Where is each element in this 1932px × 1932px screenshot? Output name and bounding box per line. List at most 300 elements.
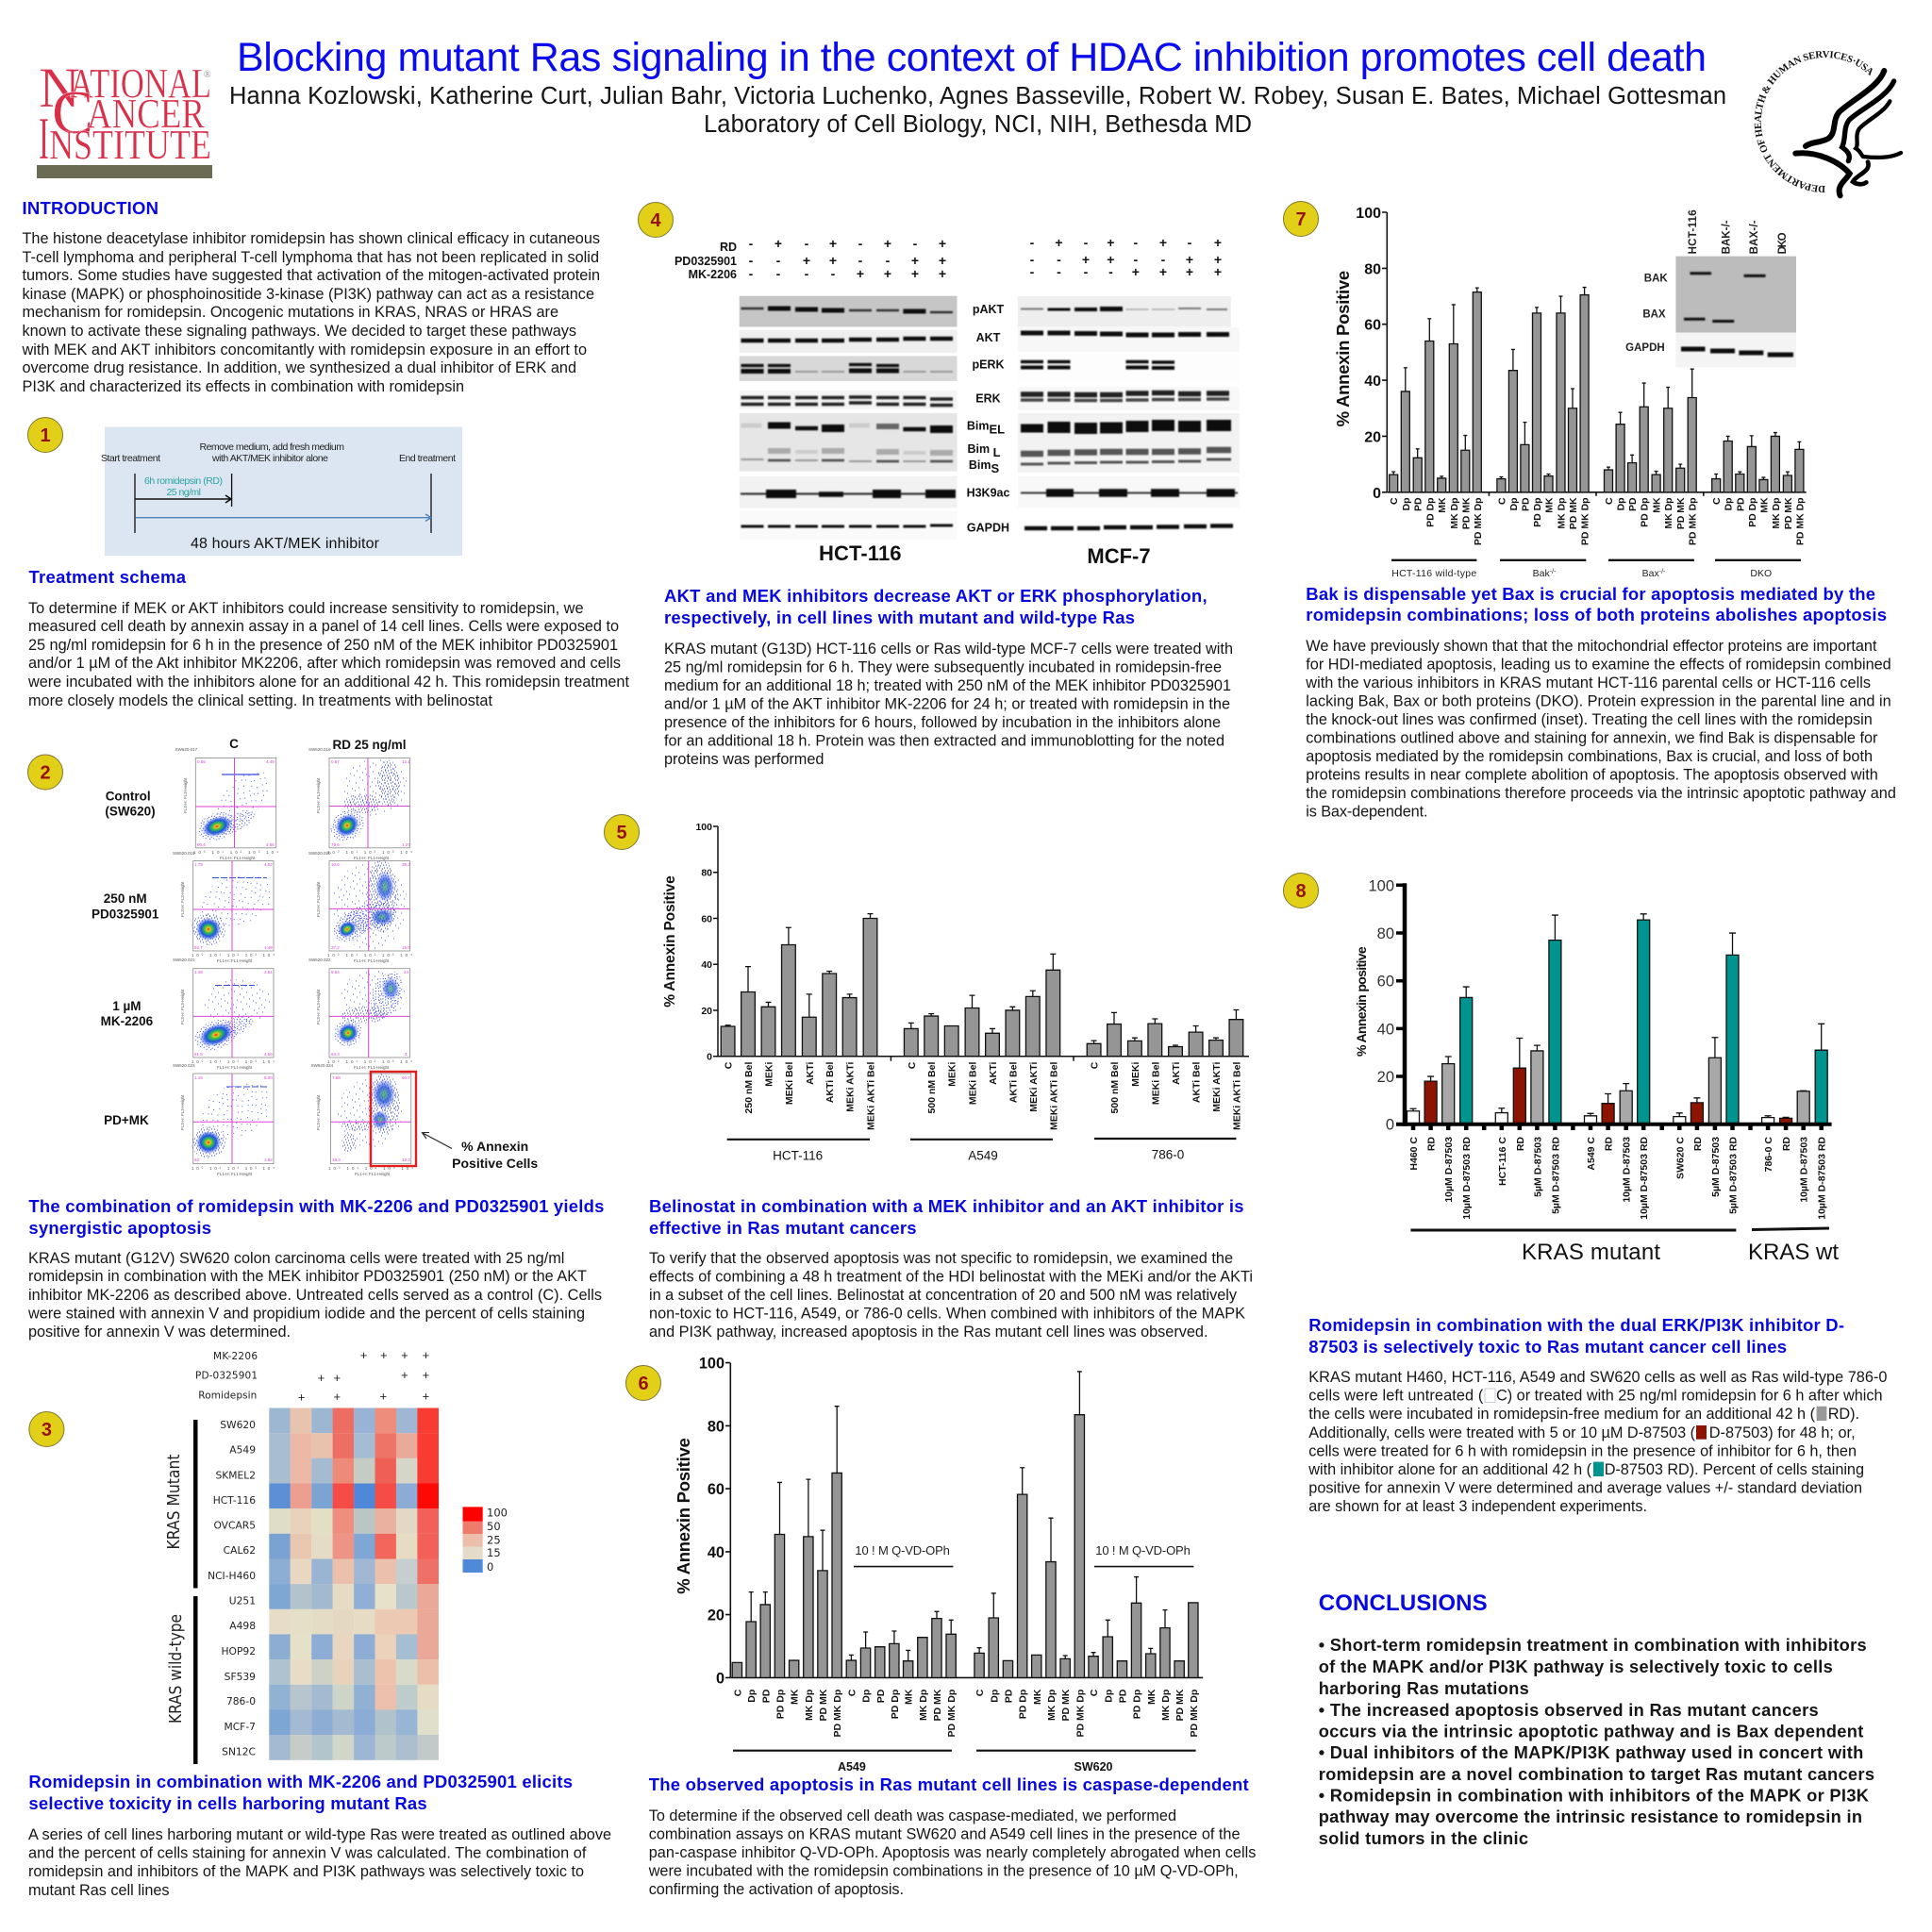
protein labels: GAPDH: [967, 521, 1009, 534]
cell line labels: [208, 1419, 256, 1758]
axes: 20: [1377, 1069, 1394, 1086]
axes: 40: [708, 1544, 724, 1561]
plot: PD RD: SW620.020: [308, 851, 331, 856]
text: treatment schema: measured cell death by annexin assay in a panel of 14 cell lines. Cells were exposed to: [28, 618, 619, 635]
x labels: PD: [1117, 1689, 1128, 1703]
bars: [732, 1372, 1198, 1677]
text: conclusions bullets: [1319, 1635, 1874, 1848]
bars: [1407, 914, 1827, 1124]
x labels: PD MK Dp: [1794, 497, 1806, 545]
callout: percent annexin positive cells: % Annexin: [461, 1139, 528, 1154]
x labels: PD: [1413, 497, 1424, 511]
panel 7: Bak/Bax bar chart: [1333, 206, 1807, 579]
x labels: 500 nM Bel: [926, 1062, 938, 1113]
x labels: MK: [1146, 1689, 1158, 1705]
plot: MK C: 4.55: [264, 1052, 273, 1057]
plot: control RD: 12.1: [402, 759, 410, 764]
treatment signs: MCF-7: +: [1107, 252, 1114, 267]
plus markers: +: [334, 1371, 341, 1385]
group labels: [1391, 560, 1801, 579]
logo: National Cancer Institute: NSTITUTE: [49, 122, 211, 168]
x labels: MK Dp: [1449, 497, 1460, 529]
panel 1: treatment schema diagram: 25 ng/ml: [166, 487, 201, 498]
axes: 0: [1386, 1117, 1394, 1134]
text: panel 8 with colour keys: D-87503 RD). Percent of cells staining: [1605, 1461, 1864, 1478]
panel 5: belinostat bar chart: [662, 822, 1249, 1162]
cell line labels: HOP92: [221, 1645, 256, 1657]
x labels: MEKi: [947, 1062, 958, 1087]
text: panel 5: in a subset of the cell lines. Belinostat at concentration of 20 and 500 nM was relatively: [649, 1287, 1238, 1304]
protein labels: pAKT: [973, 303, 1005, 316]
text: panel 6: combination assays on KRAS mutant SW620 and A549 cell lines in the presence of the: [649, 1826, 1240, 1843]
text: panel 3: romidepsin and inhibitors of the MAPK and PI3K pathways was selectively toxic to: [28, 1863, 584, 1880]
plot: PD+MK C: 5.00: [264, 1075, 273, 1080]
plot: MK C: 1.48: [194, 970, 203, 974]
plot: PD RD: 10.6: [331, 862, 340, 867]
x labels: PD MK Dp: [946, 1690, 958, 1737]
heading: panel 4: AKT and MEK inhibitors decrease AKT or ERK phosphorylation,: [664, 586, 1208, 606]
x labels: RD: [1426, 1137, 1438, 1151]
text: panel 7: the knock-out lines was confirmed (inset). Treating the cell lines with the romidepsin: [1306, 711, 1873, 728]
logo: National Cancer Institute: ANCER: [87, 91, 206, 137]
x labels: 5µM D-87503: [1710, 1137, 1722, 1197]
x labels: PD Dp: [1747, 497, 1758, 527]
x labels: PD: [1520, 497, 1531, 511]
x labels: MEKi: [764, 1062, 775, 1087]
text: panel 4: and/or 1 µM of the AKT inhibitor MK-2206 for 24 h; or treated with romidepsin in the: [664, 696, 1230, 713]
inset: Bak/Bax western blot: BAX: [1642, 309, 1666, 321]
text: conclusions bullets: harboring Ras mutations: [1319, 1678, 1529, 1698]
cell line captions: [819, 541, 1151, 568]
column and row labels: PD0325901: [92, 908, 159, 921]
axes: 20: [701, 1006, 712, 1017]
x labels: MK Dp: [1046, 1690, 1058, 1721]
text: panel 7: is Bax-dependent.: [1306, 804, 1428, 821]
plot: MK C: SW620.021: [173, 958, 195, 962]
treatment labels: [675, 241, 737, 281]
cell line labels: SW620: [220, 1419, 256, 1431]
logo: National Cancer Institute: C: [52, 78, 93, 147]
plot: MK C: 91.5: [194, 1052, 203, 1057]
text: panel 8 with colour keys: Additionally, cells were treated with 5 or 10 µM D-87503 (: [1308, 1424, 1696, 1441]
treatment header: PD-0325901: [195, 1370, 258, 1381]
badge 8: 8: [1295, 881, 1307, 902]
cell line labels: A549: [229, 1443, 256, 1457]
column and row labels: RD 25 ng/ml: [332, 738, 407, 752]
badge 2: [28, 755, 62, 790]
treatment signs: MCF-7: -: [1133, 252, 1138, 267]
treatment signs: MCF-7: +: [1159, 264, 1167, 279]
heatmap legend: 100: [487, 1506, 508, 1519]
text: conclusions bullets: solid tumors in the clinic: [1319, 1828, 1528, 1848]
column and row labels: (SW620): [105, 804, 156, 819]
inset: Bak/Bax western blot: HCT-116: [1688, 209, 1699, 254]
badge 7: [1283, 202, 1319, 236]
heading: panel 5: Belinostat in combination with a MEK inhibitor and an AKT inhibitor is: [649, 1196, 1243, 1216]
x labels: PD Dp: [1132, 1690, 1143, 1719]
axes: 60: [1364, 318, 1381, 334]
panel 4: western blots: [675, 235, 1240, 568]
heading: treatment schema: Treatment schema: [28, 567, 187, 587]
treatment signs: MCF-7: -: [1084, 235, 1089, 250]
treatment signs: MCF-7: -: [1188, 235, 1192, 250]
Q-VD-OPh annotations: 10 ! M Q-VD-OPh: [1095, 1543, 1191, 1557]
x labels: 10µM D-87503 RD: [1817, 1137, 1828, 1220]
protein labels: H3K9ac: [967, 487, 1009, 500]
x labels: PD: [875, 1689, 887, 1703]
text: panel 7: with the various inhibitors in KRAS mutant HCT-116 parental cells or HCT-116 cells: [1305, 675, 1871, 691]
treatment signs: HCT-116: +: [857, 266, 864, 281]
group labels: Bak: [1533, 568, 1550, 579]
text: panel 2: inhibitor MK-2206 as described above. Untreated cells served as a control (C). Cells: [28, 1287, 602, 1304]
x labels: Dp: [1508, 497, 1520, 510]
callout: percent annexin positive cells: Positive Cells: [452, 1156, 538, 1171]
text: panel 8 with colour keys: with inhibitor alone for an additional 42 h (: [1307, 1461, 1592, 1478]
x labels: Dp: [861, 1690, 873, 1703]
text: panel 7: combinations outlined above and staining for annexin, we find Bak is dispensable for: [1306, 730, 1878, 747]
treatment signs: MCF-7: +: [1107, 235, 1114, 250]
x labels: AKTi: [1171, 1062, 1182, 1085]
protein labels: S: [991, 461, 999, 475]
x labels: PD MK: [1568, 497, 1579, 529]
x labels: [1408, 1137, 1828, 1220]
x labels: C: [846, 1689, 858, 1696]
x labels: MK Dp: [1663, 497, 1674, 529]
treatment signs: HCT-116: -: [886, 253, 891, 268]
treatment signs: MCF-7: -: [1030, 264, 1035, 279]
x labels: 5µM D-87503 RD: [1550, 1137, 1561, 1214]
plot: PD+MK C: [173, 1063, 282, 1176]
panel 1: treatment schema diagram: with AKT/MEK inhibitor alone: [211, 453, 328, 464]
x labels: C: [1496, 497, 1507, 505]
plot: PD+MK RD with gate: FL3-H: FL3-Height: [316, 1094, 321, 1130]
plot: PD+MK C: 92: [194, 1158, 200, 1162]
protein labels: Bim: [967, 419, 989, 432]
text: panel 8 with colour keys: [1307, 1369, 1887, 1515]
text: panel 5: non-toxic to HCT-116, A549, or 786-0 cells. When combined with inhibitors of the MAPK: [649, 1306, 1245, 1323]
group bars and labels: KRAS wild-type: [166, 1614, 186, 1724]
x labels: RD: [1692, 1137, 1704, 1151]
plot: MK C: 10⁰ 10¹ 10² 10³ 10⁴: [192, 1059, 275, 1064]
text: introduction: T-cell lymphoma and peripheral T-cell lymphoma that has not been replicated in solid: [23, 249, 599, 266]
x labels: AKTi Bel: [1191, 1062, 1203, 1103]
heading: panel 8: Romidepsin in combination with the dual ERK/PI3K inhibitor D-: [1308, 1315, 1844, 1335]
cell line labels: U251: [229, 1595, 256, 1607]
text: panel 3: [28, 1826, 611, 1899]
treatment signs: MCF-7: -: [1084, 264, 1089, 279]
plot: control C: 10⁰ 10¹ 10² 10³ 10⁴: [193, 850, 278, 855]
plot: PD+MK RD with gate: 60.7: [402, 1075, 410, 1080]
x labels: MEKi AKTi Bel: [1048, 1062, 1059, 1130]
heading: panel 6: The observed apoptosis in Ras mutant cell lines is caspase-dependent: [649, 1774, 1249, 1794]
plot: PD C: FL3-H: FL3-Height: [180, 881, 185, 917]
plus markers: +: [360, 1348, 367, 1362]
plot: PD+MK RD with gate: 10⁰ 10¹ 10² 10³ 10⁴: [328, 1166, 413, 1171]
x labels: MEKi AKTi: [845, 1062, 857, 1112]
group labels: HCT-116 wild-type: [1391, 568, 1476, 579]
heading: panel 4: [664, 586, 1208, 627]
plot: MK RD: FL1-H: FL1-Height: [354, 1065, 390, 1070]
axes: 20: [708, 1607, 724, 1624]
x labels: PD MK Dp: [1580, 497, 1591, 545]
text: panel 5: [649, 1250, 1253, 1341]
plot: MK RD: 63.3: [331, 1052, 340, 1057]
treatment signs: MCF-7: -: [1030, 235, 1035, 250]
plot: control C: SW620.017: [175, 747, 198, 752]
plot: PD RD: FL3-H: FL3-Height: [316, 881, 321, 917]
plus markers: +: [401, 1368, 408, 1382]
text: panel 8 with colour keys: RD).: [1828, 1406, 1859, 1423]
x labels: RD: [1781, 1137, 1792, 1151]
axes: 0: [716, 1670, 724, 1687]
text: panel 2: KRAS mutant (G12V) SW620 colon carcinoma cells were treated with 25 ng/ml: [28, 1250, 564, 1267]
x labels: MK Dp: [918, 1690, 929, 1721]
group labels: -/-: [1550, 569, 1557, 575]
text: panel 7: for HDI-mediated apoptosis, leading us to examine the effects of romidepsin combined: [1306, 657, 1891, 674]
treatment signs: HCT-116: -: [749, 236, 754, 251]
panel 1: treatment schema diagram: Start treatment: [101, 453, 160, 464]
text: panel 7: We have previously shown that that the mitochondrial effector proteins are important: [1306, 638, 1877, 655]
text: panel 4: [664, 641, 1233, 768]
plus markers: +: [380, 1348, 388, 1362]
heading: panel 3: selective toxicity in cells harboring mutant Ras: [28, 1793, 427, 1813]
text: introduction: overcome drug resistance. In addition, we synthesized a dual inhibitor of ERK and: [23, 359, 576, 376]
x labels: [1389, 497, 1806, 545]
plot: control C: FL1-H: FL1-Height: [220, 856, 256, 860]
plot: PD C: [173, 851, 279, 963]
heading: panel 7: romidepsin combinations; loss of both proteins abolishes apoptosis: [1306, 605, 1887, 625]
logo: National Cancer Institute: ATIONAL: [70, 60, 211, 107]
callout: percent annexin positive cells: [452, 1139, 538, 1171]
treatment signs: MCF-7: +: [1159, 235, 1167, 250]
text: panel 8 with colour keys: KRAS mutant H460, HCT-116, A549 and SW620 cells as well as Ras wild-type 786-0: [1308, 1369, 1887, 1386]
x labels: MK: [1758, 497, 1770, 513]
x labels: 10µM D-87503 RD: [1639, 1137, 1650, 1220]
x labels: 10µM D-87503: [1799, 1137, 1810, 1203]
text: panel 2: romidepsin in combination with the MEK inhibitor PD0325901 (250 nM) or the AKT: [28, 1268, 587, 1285]
x labels: PD MK: [1174, 1689, 1186, 1722]
heading: panel 8: [1308, 1315, 1844, 1357]
bars: [721, 914, 1243, 1057]
text: introduction: PI3K and characterized its effects in combination with romidepsin: [23, 378, 464, 395]
text: conclusions bullets: romidepsin are a novel combination to target Ras mutant cancers: [1319, 1764, 1874, 1784]
heatmap legend: [462, 1506, 508, 1574]
axes: [662, 822, 1249, 1063]
text: introduction: mechanism for romidepsin. Oncogenic mutations in KRAS, NRAS or HRAS are: [23, 304, 558, 321]
badge 6: [626, 1366, 660, 1400]
plot: MK C: FL3-H: FL3-Height: [180, 989, 185, 1024]
column and row labels: [92, 737, 407, 1127]
x labels: Dp: [1724, 497, 1735, 510]
plot: control RD: FL3-H: FL3-Height: [316, 777, 321, 813]
text: panel 5: effects of combining a 48 h treatment of the HDI belinostat with the MEKi and/or the AKTi: [649, 1268, 1253, 1285]
plus markers: +: [334, 1390, 341, 1404]
text: treatment schema: [27, 600, 629, 709]
logo: National Cancer Institute: I: [39, 105, 49, 172]
axes: 80: [1364, 261, 1381, 277]
plot: PD RD: 15.9: [402, 945, 410, 950]
treatment signs: MCF-7: +: [1132, 264, 1140, 279]
inset: Bak/Bax western blot: BAX-/-: [1749, 220, 1760, 254]
treatment signs: HCT-116: +: [884, 266, 891, 281]
heading: panel 8: 87503 is selectively toxic to Ras mutant cancer cell lines: [1308, 1337, 1787, 1357]
arrow: annexin callout: [423, 1132, 452, 1149]
cell line labels: SN12C: [222, 1745, 256, 1758]
protein labels: L: [993, 445, 1001, 459]
heatmap legend: 0: [487, 1560, 493, 1574]
x labels: PD MK Dp: [1189, 1690, 1200, 1737]
inset: Bak/Bax western blot: DKO: [1777, 232, 1789, 254]
x labels: MK: [1652, 497, 1663, 513]
plot: MK C: 2.51: [264, 970, 273, 974]
x labels: C: [907, 1061, 918, 1069]
text: panel 2: were stained with annexin V and propidium iodide and the percent of cells staining: [27, 1306, 585, 1323]
x labels: 10µM D-87503: [1622, 1137, 1633, 1203]
plot: control RD: 1.27: [402, 842, 410, 847]
x labels: 5µM D-87503: [1532, 1137, 1543, 1197]
x labels: Dp: [1401, 497, 1412, 510]
x labels: C: [1389, 497, 1400, 505]
cell line captions: HCT-116: [819, 541, 902, 565]
treatment signs: HCT-116: +: [803, 253, 810, 268]
group labels: Bax: [1642, 568, 1659, 579]
plot: PD C: 1.48: [264, 945, 273, 950]
x labels: 250 nM Bel: [743, 1062, 755, 1113]
heading: panel 3: Romidepsin in combination with MK-2206 and PD0325901 elicits: [28, 1772, 573, 1791]
axes: % Annexin Positive: [1333, 271, 1353, 426]
cell line groups: [727, 1139, 1236, 1162]
badge 4: 4: [650, 210, 661, 231]
x labels: PD Dp: [775, 1690, 787, 1719]
axes: [1333, 206, 1807, 502]
text: panel 4: medium for an additional 18 h; treated with 250 nM of the MEK inhibitor PD0325901: [664, 677, 1231, 694]
plot: control RD: FL1-H: FL1-Height: [354, 856, 390, 860]
plot: control C: 4.56: [266, 842, 275, 847]
badge 2: 2: [40, 762, 51, 783]
text: introduction: tumors. Some studies have suggested that activation of the mitogen-activated protein: [23, 267, 600, 284]
column and row labels: PD+MK: [104, 1113, 149, 1127]
text: treatment schema: more closely models the clinical setting. In treatments with belinostat: [28, 692, 492, 709]
treatment signs: HCT-116: +: [884, 236, 891, 251]
treatment header: MK-2206: [213, 1351, 258, 1362]
plus markers: +: [318, 1371, 325, 1385]
treatment signs: HCT-116: -: [776, 266, 781, 281]
axes: 80: [708, 1418, 724, 1435]
panel 1: treatment schema diagram: 6h romidepsin (RD): [144, 475, 223, 487]
x labels: MK: [904, 1689, 915, 1705]
plot: PD RD: [308, 851, 412, 963]
axes: 0: [707, 1052, 712, 1063]
treatment signs: MCF-7: -: [1030, 252, 1035, 267]
heading: panel 2: [28, 1196, 604, 1238]
heading: panel 7: Bak is dispensable yet Bax is crucial for apoptosis mediated by the: [1306, 584, 1875, 604]
text: panel 5: To verify that the observed apoptosis was not specific to romidepsin, we examined the: [649, 1250, 1233, 1267]
treatment signs: HCT-116: [749, 236, 946, 281]
treatment signs: HCT-116: -: [749, 253, 754, 268]
heat cells: [269, 1407, 439, 1760]
x labels: PD Dp: [1424, 497, 1436, 527]
text: panel 7: the romidepsin combinations therefore proceeds via the intrinsic apoptotic pathway and: [1306, 785, 1896, 802]
axes: 40: [1377, 1021, 1394, 1038]
protein labels: AKT: [976, 331, 1001, 344]
treatment signs: HCT-116: +: [911, 266, 919, 281]
treatment signs: MCF-7: +: [1214, 235, 1222, 250]
text: treatment schema: were incubated with the inhibitors alone for an additional 42 h. This romidepsin treatment: [27, 674, 629, 691]
plot: MK RD: 9.64: [331, 970, 340, 974]
axes: 80: [701, 868, 712, 879]
heading: panel 2: The combination of romidepsin with MK-2206 and PD0325901 yields: [28, 1196, 604, 1216]
text: panel 4: for an additional 18 h. Protein was then extracted and immunoblotting for the noted: [664, 732, 1224, 749]
protein labels: Bim: [969, 458, 991, 472]
treatment signs: MCF-7: -: [1057, 252, 1061, 267]
protein labels: [967, 303, 1009, 534]
x labels: 10µM D-87503: [1443, 1137, 1455, 1203]
KRAS group labels: KRAS wt: [1748, 1240, 1839, 1265]
axes: 80: [1377, 925, 1394, 942]
treatment signs: HCT-116: +: [774, 236, 782, 251]
x labels: MK: [790, 1689, 801, 1705]
plus markers: +: [380, 1389, 387, 1404]
x labels: AKTi Bel: [824, 1062, 836, 1103]
plot: PD+MK C: 1.82: [264, 1158, 273, 1162]
axes: 60: [701, 913, 712, 924]
x labels: PD Dp: [1640, 497, 1651, 527]
x labels: MK: [1437, 497, 1448, 513]
panel 1: treatment schema diagram: End treatment: [399, 453, 456, 464]
inset: Bak/Bax western blot: GAPDH: [1625, 342, 1665, 354]
axes: [674, 1356, 1203, 1687]
text: panel 8 with colour keys: cells were treated for 6 h with romidepsin in the presence of inhibitor for 6 h, then: [1308, 1443, 1857, 1460]
treatment signs: HCT-116: +: [911, 253, 919, 268]
plus markers: [298, 1348, 429, 1404]
x labels: PD MK: [1060, 1689, 1072, 1722]
plot: PD C: SW620.019: [173, 851, 195, 856]
text: panel 2: [27, 1250, 602, 1341]
x labels: PD MK: [1460, 497, 1472, 529]
logo: National Cancer Institute: N: [39, 57, 80, 119]
x labels: SW620 C: [1674, 1137, 1686, 1179]
text: panel 8 with colour keys: cells were left untreated (: [1308, 1387, 1484, 1404]
authors: Hanna Kozlowski, Katherine Curt, Julian Bahr, Victoria Luchenko, Agnes Basseville, Robert W. Robey, Susan E. Bates, Michael Gottesman: [229, 83, 1726, 109]
cell line captions: MCF-7: [1087, 544, 1151, 568]
title: Blocking mutant Ras signaling in the context of HDAC inhibition promotes cell death: [237, 35, 1707, 80]
plot: PD C: 10⁰ 10¹ 10² 10³ 10⁴: [192, 953, 275, 958]
x labels: C: [1090, 1061, 1101, 1069]
plot: control C: 0.55: [197, 759, 206, 764]
cell line labels: SKMEL2: [215, 1469, 256, 1481]
text: panel 4: proteins was performed: [664, 751, 824, 768]
badge 7: 7: [1295, 209, 1307, 230]
treatment signs: MCF-7: [1030, 235, 1222, 279]
panel 8: D-87503 bar chart: [1354, 877, 1839, 1265]
badge 6: 6: [638, 1374, 649, 1394]
KRAS group labels: KRAS mutant: [1522, 1240, 1660, 1265]
heading: panel 3: [28, 1772, 573, 1813]
treatment signs: MCF-7: -: [1133, 235, 1138, 250]
text: panel 6: were incubated with the romidepsin combinations in the presence of 10 µM Q-VD-OPh,: [648, 1862, 1239, 1879]
protein labels: Bim: [967, 442, 990, 456]
x labels: PD MK: [1675, 497, 1687, 529]
axes: 100: [1368, 877, 1394, 894]
plot: PD+MK C: 10⁰ 10¹ 10² 10³ 10⁴: [192, 1166, 275, 1171]
text: panel 7: lacking Bak, Bax or both proteins (DKO). Protein expression in the parental line and in: [1306, 692, 1891, 709]
axes: [1354, 877, 1832, 1134]
plot: MK RD: 24: [404, 970, 409, 974]
x labels: MK Dp: [1771, 497, 1782, 529]
logo: HHS seal: DEPARTMENT OF HEALTH & HUMAN SERVICES·USA: [1755, 51, 1873, 192]
text: conclusions bullets: of the MAPK and/or PI3K pathway is selectively toxic to cells: [1319, 1657, 1833, 1676]
treatment signs: HCT-116: -: [749, 266, 754, 281]
